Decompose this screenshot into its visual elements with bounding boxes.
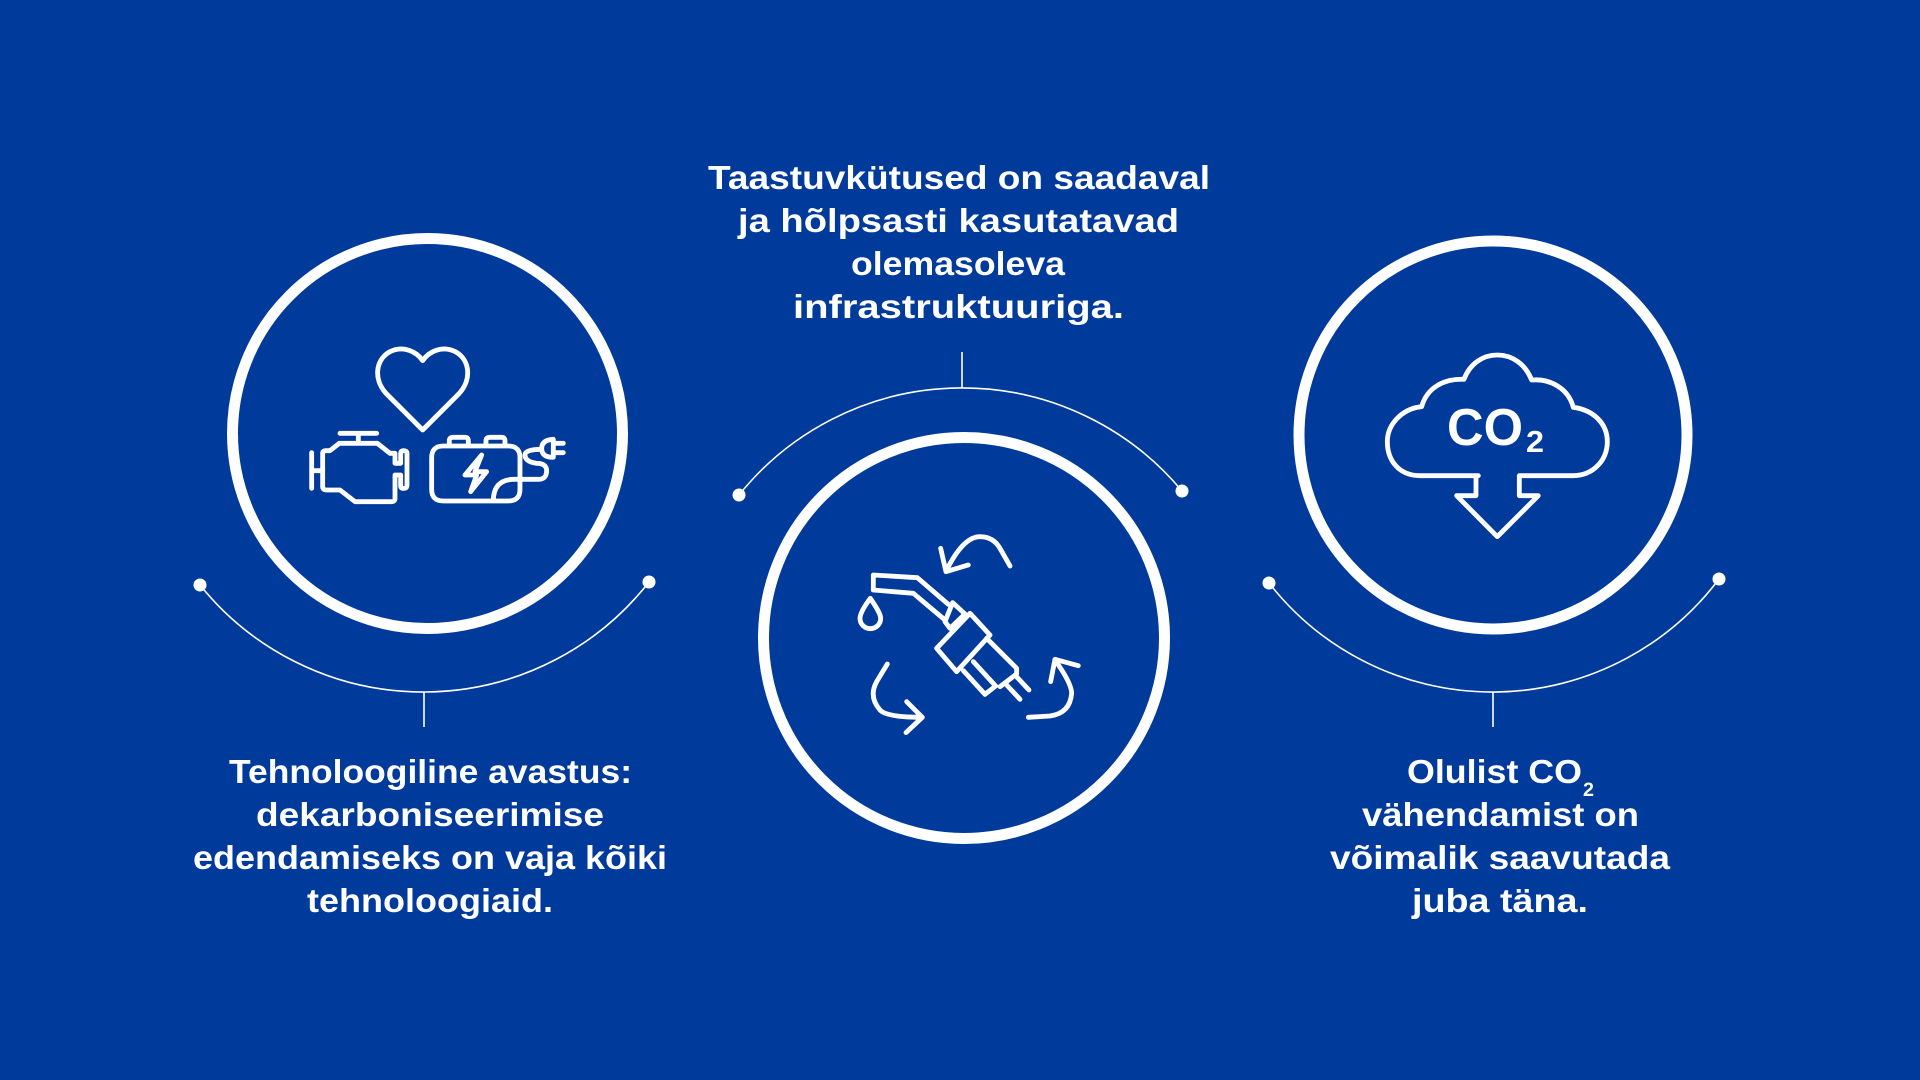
icon: fuel drop — [860, 598, 881, 629]
panel: technology discovery — [193, 238, 667, 919]
text: CO2 reduction — [1330, 753, 1671, 919]
text: technology discovery: tehnoloogiaid. — [307, 882, 553, 919]
panel: renewable fuels — [708, 159, 1210, 838]
text: technology discovery — [193, 753, 667, 919]
text: technology discovery: edendamiseks on vaja kõiki — [193, 839, 667, 876]
text: CO2 reduction: 2 — [1583, 780, 1594, 801]
text: renewable fuels — [708, 159, 1210, 325]
text: renewable fuels: olemasoleva — [851, 245, 1066, 282]
circle: CO2 — [1299, 241, 1687, 629]
icon: nozzle — [873, 575, 1029, 699]
text: CO2 reduction: vähendamist on — [1362, 796, 1639, 833]
text: technology discovery: dekarboniseerimise — [256, 796, 604, 833]
icon: heart — [378, 349, 468, 430]
icon: CO2 cloud with down arrow — [1387, 355, 1607, 537]
text: renewable fuels: infrastruktuuriga. — [793, 288, 1124, 325]
text: CO2 reduction: juba täna. — [1411, 882, 1588, 919]
circle: fuel — [764, 438, 1164, 838]
icon: recycling arrows — [873, 537, 1078, 733]
arc connector — [732, 352, 1188, 502]
circle: technologies — [232, 238, 622, 628]
panel: CO2 reduction — [1262, 241, 1726, 919]
icon: CO2 cloud with down arrow: 2 — [1526, 424, 1544, 459]
text: CO2 reduction: võimalik saavutada — [1330, 839, 1671, 876]
icon: engine — [312, 433, 407, 502]
arc connector — [1262, 572, 1726, 727]
text: technology discovery: Tehnoloogiline avastus: — [229, 753, 632, 790]
icon: fuel nozzle with recycling arrows — [860, 537, 1078, 733]
icon: heart, engine and battery — [312, 349, 563, 502]
text: CO2 reduction: Olulist CO — [1407, 753, 1582, 790]
icon: battery with plug — [432, 437, 563, 501]
arc connector — [194, 576, 656, 727]
text: renewable fuels: Taastuvkütused on saadaval — [708, 159, 1210, 196]
icon: CO2 cloud with down arrow: CO — [1447, 399, 1523, 457]
text: renewable fuels: ja hõlpsasti kasutatavad — [737, 202, 1179, 239]
